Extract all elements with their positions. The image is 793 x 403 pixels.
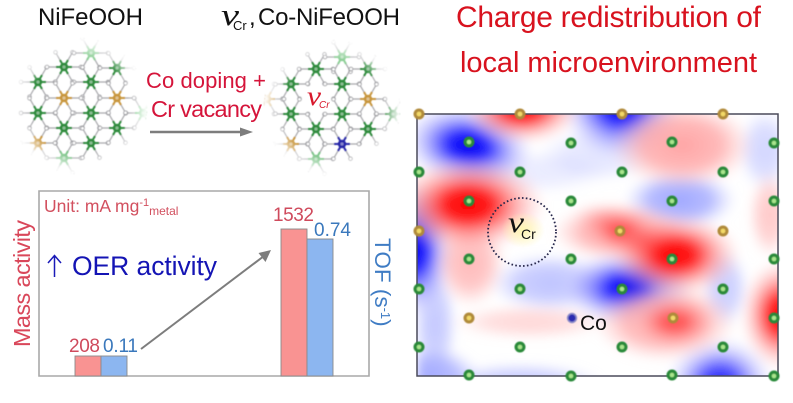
pale blue regions	[418, 115, 778, 376]
heading: vCr,Co-NiFeOOH: Co-NiFeOOH	[258, 4, 400, 31]
chart frame	[39, 191, 369, 376]
map frame	[417, 114, 778, 376]
y axis label: TOF: -1	[378, 308, 393, 319]
atoms: green	[414, 136, 780, 382]
vacancy label: Cr	[521, 226, 536, 242]
vacancy label: ν	[508, 206, 525, 239]
heading: vCr,Co-NiFeOOH: ,	[249, 4, 256, 31]
unit label: Unit: mA mg	[44, 196, 139, 216]
y axis label: TOF: TOF (s	[370, 238, 395, 308]
title: charge redistribution: local microenvironment	[460, 47, 757, 79]
atoms: gold	[414, 108, 728, 324]
value labels: 0.74	[314, 220, 351, 241]
strong blue regions	[418, 114, 769, 376]
value labels	[69, 205, 351, 357]
callout: Co doping + Cr vacancy: Cr vacancy	[151, 96, 262, 122]
OER activity text: OER activity	[72, 251, 218, 281]
unit label: -1	[139, 197, 149, 209]
bars: before	[75, 356, 127, 376]
atom: cobalt	[567, 313, 577, 323]
panel: charge density map	[412, 108, 780, 382]
panel: activity bar chart	[9, 191, 395, 376]
charge density contours	[418, 114, 778, 376]
title: charge redistribution	[456, 1, 762, 79]
panel: NiFeOOH structure	[18, 8, 148, 172]
heading: vCr,Co-NiFeOOH: Cr	[233, 18, 247, 33]
heading: NiFeOOH: NiFeOOH	[38, 4, 143, 31]
panel: doped structure	[222, 8, 400, 172]
strong red regions	[418, 114, 778, 368]
value labels: 1532	[273, 205, 314, 226]
value labels: 0.11	[103, 336, 138, 357]
arrow: increase	[141, 250, 271, 349]
bars: after	[281, 229, 333, 376]
icon: up arrow	[48, 256, 61, 277]
vacancy label: Cr	[319, 100, 330, 111]
callout: Co doping + Cr vacancy	[146, 68, 266, 122]
pale red regions	[434, 101, 792, 362]
label: Co: Co	[580, 312, 607, 335]
vacancy label: ν	[307, 81, 321, 111]
y axis label: TOF: )	[370, 319, 395, 327]
y axis label: mass activity: Mass activity	[9, 220, 35, 347]
arrow: transformation	[150, 128, 253, 136]
title: charge redistribution: Charge redistribution of	[456, 1, 762, 34]
vacancy circle	[488, 198, 556, 266]
vacancy label	[501, 206, 545, 248]
lattice: doped atomic structure with Cr vacancy	[264, 43, 400, 172]
vacancy label	[304, 81, 330, 112]
callout: Co doping + Cr vacancy: Co doping +	[146, 68, 266, 93]
heading: vCr,Co-NiFeOOH	[221, 0, 400, 33]
unit label: metal	[149, 204, 178, 218]
lattice: NiFeOOH atomic structure	[18, 41, 148, 172]
value labels: 208	[69, 336, 100, 357]
